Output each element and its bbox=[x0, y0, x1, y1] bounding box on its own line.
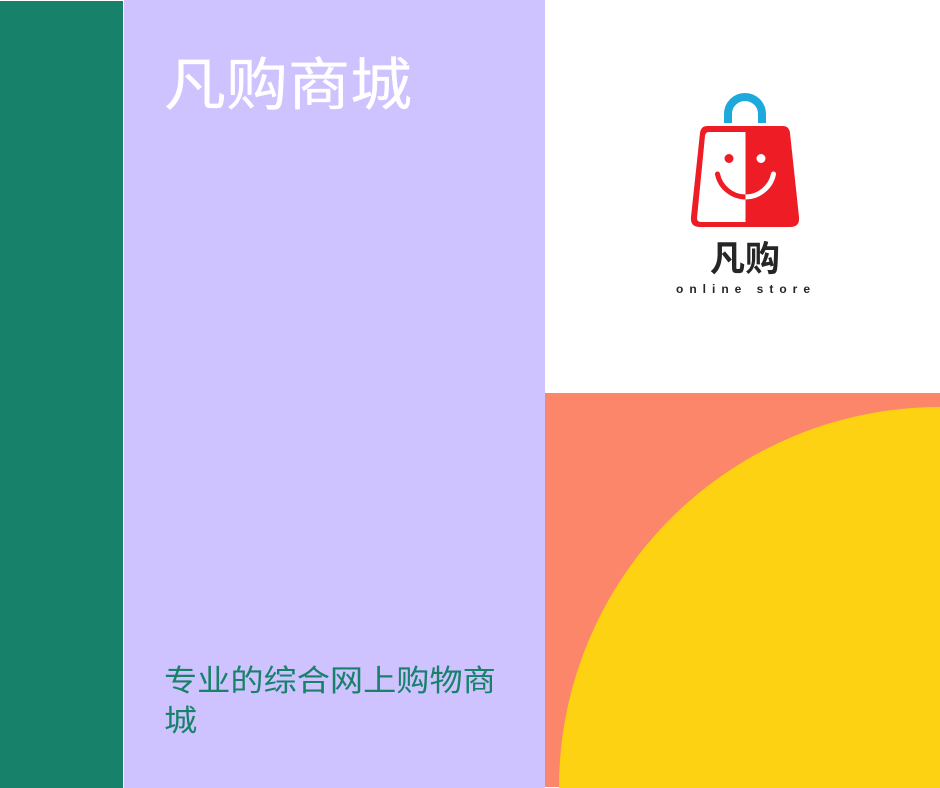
subtitle: 城 bbox=[164, 704, 197, 738]
logo bbox=[676, 93, 816, 296]
panel: lavender column bbox=[124, 0, 545, 788]
panel: green stripe bbox=[0, 1, 123, 788]
logo wordmark: 凡购 bbox=[710, 240, 780, 279]
subtitle: 专业的综合网上购物商 bbox=[164, 665, 496, 698]
title: 凡购商城 bbox=[164, 54, 412, 118]
icon: shopping bag with smiley bbox=[690, 93, 800, 227]
logo tagline: online store bbox=[676, 282, 816, 296]
panel: coral and yellow quarter circle bbox=[545, 393, 940, 788]
subtitle bbox=[164, 665, 496, 738]
